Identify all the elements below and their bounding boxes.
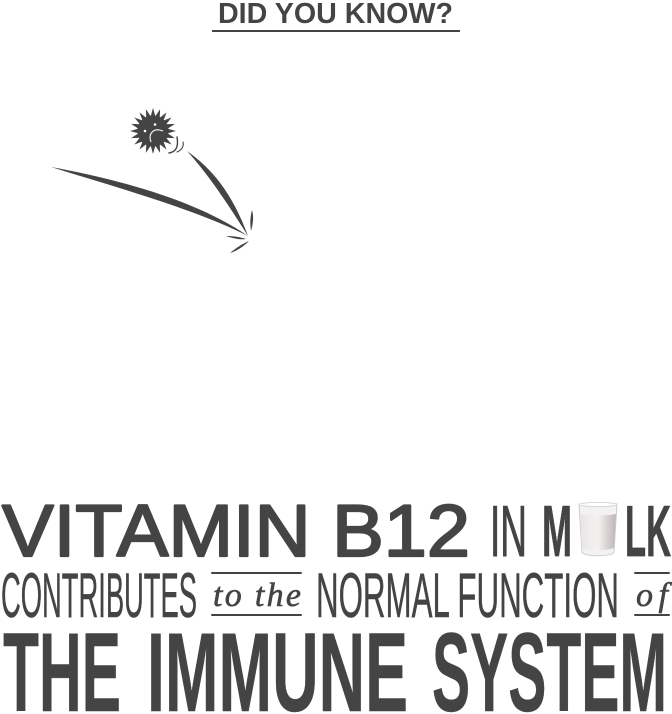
motion marks beside sun [169,137,183,153]
arrow: long curve [51,167,248,236]
arrow: short curve [187,151,248,236]
title: contributes to the normal function of [1,561,672,631]
text: in: IN [490,492,527,572]
title: vitamin b12 in milk [2,491,671,572]
text: vitamin b12: VITAMIN B12 [2,491,470,572]
title: the immune system [3,610,667,714]
arrow tip marks [226,210,253,253]
icon: spiky sun [130,108,176,154]
title: contributes to the normal function of: CONTRIBUTES [1,561,197,631]
badge: to the: to the [213,577,301,614]
text: m: M [542,492,572,572]
icon: glass of milk [579,502,617,556]
badge: of: of [636,577,672,614]
illustration: sun with arrows [51,108,253,253]
